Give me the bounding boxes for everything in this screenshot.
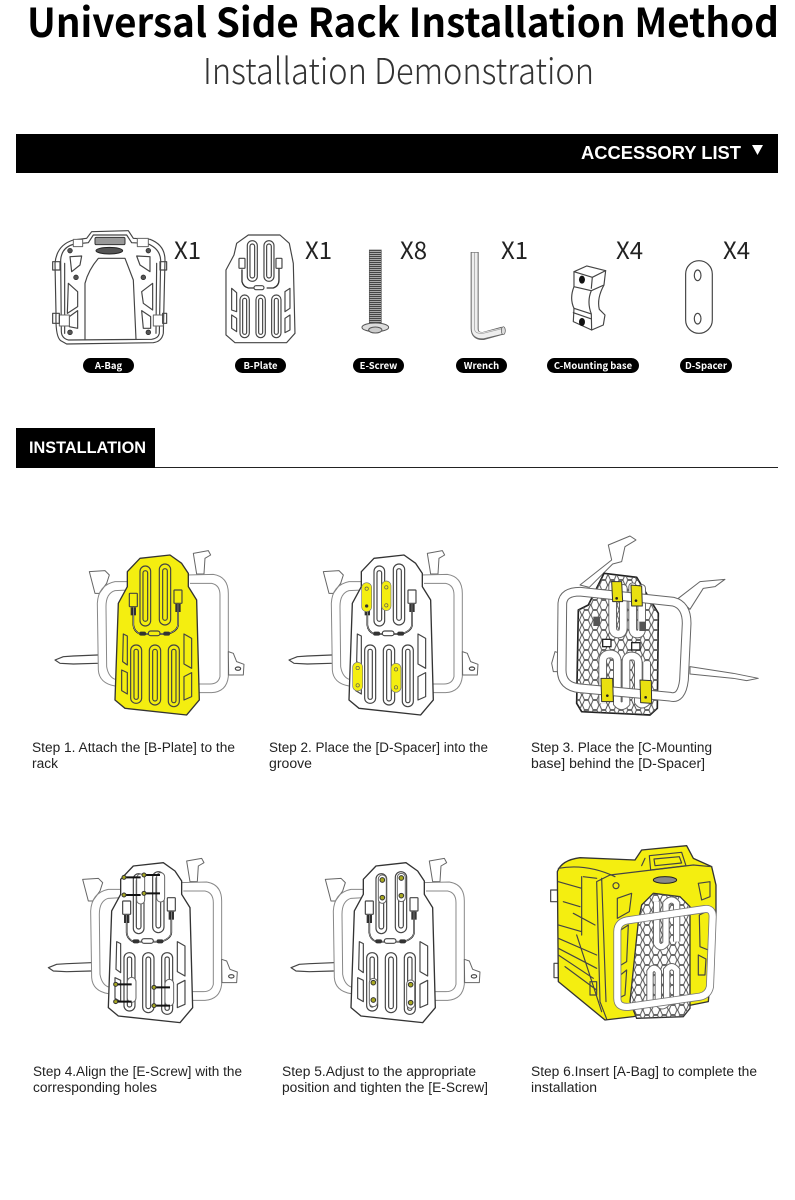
illustration: bag installed [551,846,716,1020]
icon: screw [362,250,389,333]
label pill [353,358,404,373]
caption: Step 6.Insert [A-Bag] to complete the [531,1064,757,1079]
quantity: X4 [616,231,643,266]
caption [33,1064,242,1095]
label pill [456,358,507,373]
accessory: B-Plate [226,231,332,373]
label pill: A-Bag [94,358,123,372]
caption: Step 4.Align the [E-Screw] with the [33,1064,242,1079]
label pill: E-Screw [360,358,397,372]
accessory: Wrench [456,231,528,373]
icon: hex wrench [475,252,505,336]
step 6 [531,846,757,1095]
caption: Step 1. Attach the [B-Plate] to the [32,740,235,755]
caption: position and tighten the [E-Screw] [282,1080,488,1095]
caption: Step 2. Place the [D-Spacer] into the [269,740,488,755]
caption [282,1064,488,1095]
quantity: X8 [400,231,427,266]
accessory: E-Screw [353,231,427,373]
label pill: B-Plate [243,358,278,372]
quantity: X1 [305,231,332,266]
caption: Step 3. Place the [C-Mounting [531,740,712,755]
label pill [83,358,134,373]
subtitle: Installation Demonstration [203,43,594,95]
caption: corresponding holes [33,1080,157,1095]
illustration: screws aligned [48,858,237,1023]
quantity: X1 [174,231,201,266]
caption [32,740,235,771]
accessory: C-Mounting base [547,231,643,373]
accessory list banner: ACCESSORY LIST [581,142,742,163]
illustration: spacers on plate [289,551,478,715]
caption: base] behind the [D-Spacer] [531,756,705,771]
caption [269,740,488,771]
step 4 [33,858,242,1095]
label pill [235,358,286,373]
icon: spacer [686,261,712,333]
caption: installation [531,1080,597,1095]
illustration: mounting bases behind rack [552,536,758,715]
label pill: D-Spacer [685,358,728,372]
quantity: X4 [723,231,750,266]
caption: rack [32,756,58,771]
step 1 [32,551,244,771]
installation heading [16,428,778,468]
caption [531,740,712,771]
caption: Step 5.Adjust to the appropriate [282,1064,476,1079]
step 5 [282,858,488,1095]
step 2 [269,551,488,771]
illustration: plate on rack [55,551,244,715]
step 3 [531,536,758,771]
caption: groove [269,756,312,771]
accessory list banner [16,134,778,173]
quantity: X1 [501,231,528,266]
label pill: C-Mounting base [554,358,633,372]
icon: bag [53,231,167,344]
accessory: D-Spacer [680,231,750,373]
icon: plate [226,235,295,343]
icon: mounting block [572,266,606,330]
installation heading: INSTALLATION [29,439,146,457]
label pill: Wrench [464,358,499,372]
accessory: A-Bag [53,231,201,373]
caption [531,1064,757,1095]
illustration: screws tightened [291,858,480,1023]
